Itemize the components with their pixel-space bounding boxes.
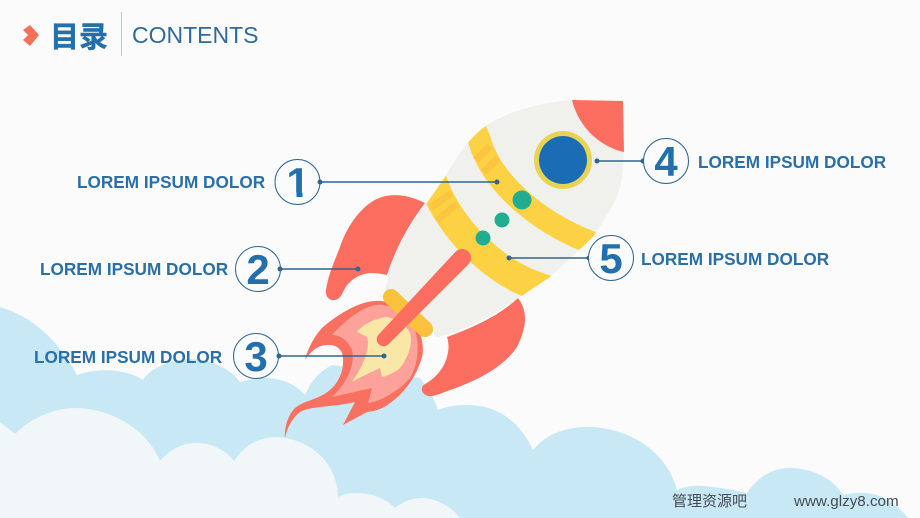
rocket nose cone [572, 100, 624, 152]
callout 5 [506, 235, 830, 282]
rocket body [385, 100, 624, 337]
lower stripe shading [431, 193, 457, 220]
rocket illustration [285, 100, 624, 438]
icon: chevron [23, 25, 39, 46]
rocket stripes [428, 118, 606, 294]
callout 4: 4 [654, 138, 678, 185]
rocket lower stripe [428, 170, 560, 294]
flame middle [332, 305, 418, 403]
flame inner [352, 317, 411, 382]
rocket red rod [377, 249, 471, 346]
callout 2 [40, 246, 360, 293]
upper stripe shading [476, 146, 498, 172]
flame outer [285, 301, 423, 438]
header divider [121, 12, 122, 56]
callout 1: LOREM IPSUM DOLOR [77, 172, 266, 192]
heading: CONTENTS: CONTENTS [132, 22, 258, 48]
callout 5: LOREM IPSUM DOLOR [641, 249, 830, 269]
footer text: 管理资源吧 [672, 493, 747, 510]
callout 1 [77, 159, 500, 206]
callout 2: LOREM IPSUM DOLOR [40, 259, 229, 279]
callout 3: LOREM IPSUM DOLOR [34, 347, 223, 367]
heading: 目录: 目录 [50, 22, 108, 54]
rocket lower fin [422, 298, 525, 396]
rocket upper fin [326, 195, 425, 300]
back cloud layer [0, 307, 908, 518]
rocket nozzle band [391, 297, 425, 329]
callout 3: 3 [244, 333, 268, 380]
callout 4 [594, 138, 887, 185]
callout 1: 1 [286, 159, 310, 206]
footer text: www.glzy8.com [793, 493, 899, 510]
front cloud layer [0, 408, 460, 518]
callout 2: 2 [246, 246, 270, 293]
rocket teal rivets [476, 190, 532, 246]
rocket window [534, 131, 592, 189]
callout 3 [34, 333, 386, 380]
title header [23, 12, 258, 56]
callout 4: LOREM IPSUM DOLOR [698, 152, 887, 172]
callout 5: 5 [599, 235, 623, 282]
footer text [672, 493, 899, 510]
rocket upper stripe [468, 126, 596, 250]
